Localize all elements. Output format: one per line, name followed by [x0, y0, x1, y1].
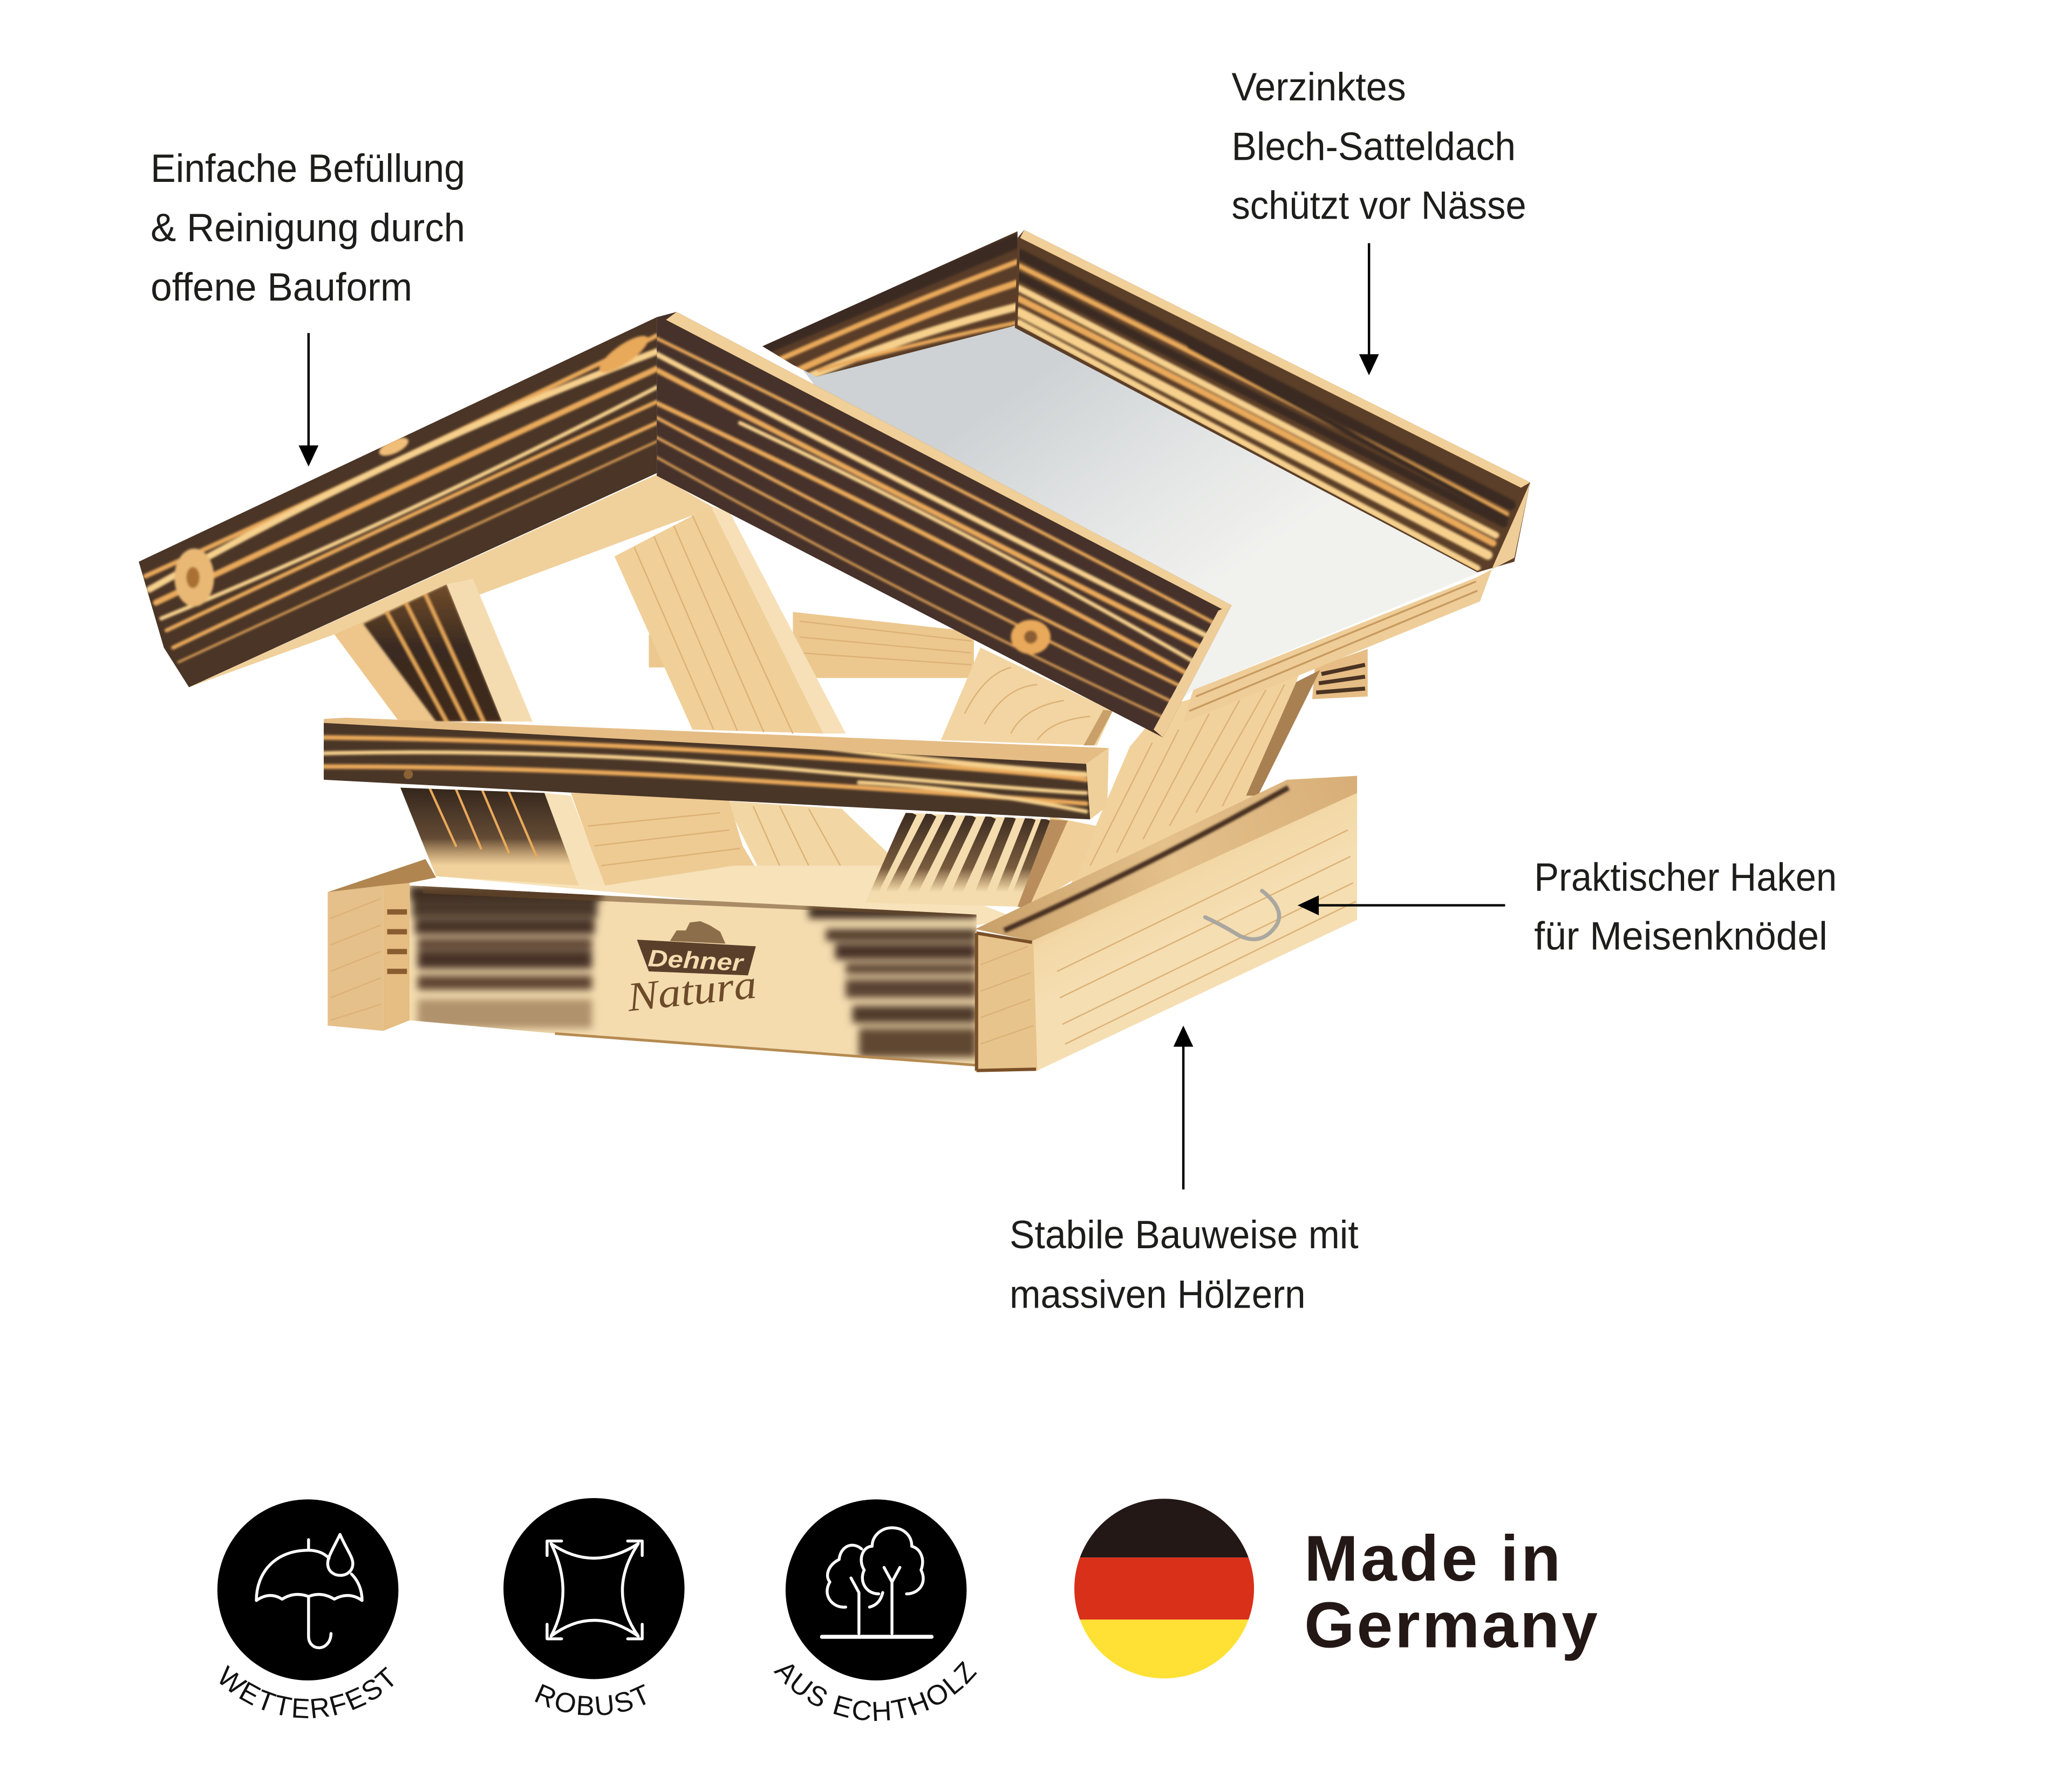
arrow: down to metal roof: [1359, 243, 1379, 376]
callout: filling and cleaning: [151, 146, 465, 467]
icon: umbrella with rain drop: [256, 1534, 362, 1648]
label: AUS ECHTHOLZ: AUS ECHTHOLZ: [774, 1661, 977, 1721]
back cross bar: [649, 612, 1368, 699]
logo: Dehner Natura: Dehner: [647, 945, 745, 977]
icon: two trees: [822, 1528, 932, 1637]
roof underside: [189, 474, 713, 688]
badge: German flag circle: [1074, 1499, 1254, 1679]
feeder interior: [423, 793, 1097, 925]
front roof board left: [139, 317, 657, 688]
callout: galvanized roof: [1231, 64, 1526, 376]
callout: hook: [1298, 855, 1837, 958]
callout text: für Meisenknödel: für Meisenknödel: [1534, 914, 1828, 958]
front roof board right: [657, 312, 1231, 738]
callout text: Blech-Satteldach: Blech-Satteldach: [1231, 124, 1516, 168]
arrow: left to hook: [1298, 895, 1505, 915]
callout text: Verzinktes: Verzinktes: [1231, 64, 1406, 109]
far roof board right: [1015, 230, 1530, 572]
lower right post: [865, 813, 1068, 909]
logo: Dehner Natura: Natura: [625, 962, 759, 1020]
far roof eave edge: [1183, 482, 1530, 723]
far roof board left: [762, 232, 1018, 378]
heading: Made in Germany: Germany: [1304, 1589, 1598, 1662]
icon: stretched square with corner arrows: [547, 1541, 642, 1639]
badge: Aus Echtholz: [774, 1499, 977, 1721]
arrow: up to base: [1174, 1025, 1193, 1189]
metal roof sheet: [793, 326, 1480, 713]
badge: Wetterfest: [217, 1499, 398, 1718]
callout text: massiven Hölzern: massiven Hölzern: [1010, 1271, 1306, 1316]
label: WETTERFEST: WETTERFEST: [220, 1665, 394, 1718]
center post: [615, 506, 901, 868]
front rail: [324, 718, 1109, 819]
far right post: [1069, 668, 1320, 906]
upper left post: [335, 579, 533, 722]
callout text: Reinigung durch: & Reinigung durch: [151, 205, 465, 250]
base left end block: [328, 859, 436, 1031]
heading: Made in Germany: [1304, 1522, 1598, 1662]
callout text: Praktischer Haken: Praktischer Haken: [1534, 855, 1837, 900]
product: bird feeder house: [139, 230, 1530, 1072]
base front plate with burn marks: [410, 883, 977, 1065]
badge: Robust: [503, 1498, 685, 1715]
callout text: offene Bauform: offene Bauform: [151, 264, 412, 309]
lower left post: [400, 788, 605, 886]
callout text: schützt vor Nässe: schützt vor Nässe: [1231, 182, 1526, 227]
hook: [1205, 891, 1279, 939]
callout: sturdy construction: [1010, 1025, 1359, 1316]
callout text: Stabile Bauweise mit: Stabile Bauweise mit: [1010, 1212, 1359, 1257]
upper right post: [941, 648, 1113, 745]
base right side board: [975, 776, 1357, 1071]
callout text: Einfache Befüllung: Einfache Befüllung: [151, 146, 465, 190]
base front corner block: [975, 932, 1037, 1072]
label: ROBUST: ROBUST: [535, 1684, 646, 1715]
heading: Made in Germany: Made in: [1304, 1522, 1560, 1595]
arrow: down to front roof: [298, 333, 318, 467]
logo: Dehner Natura: [625, 921, 759, 1020]
